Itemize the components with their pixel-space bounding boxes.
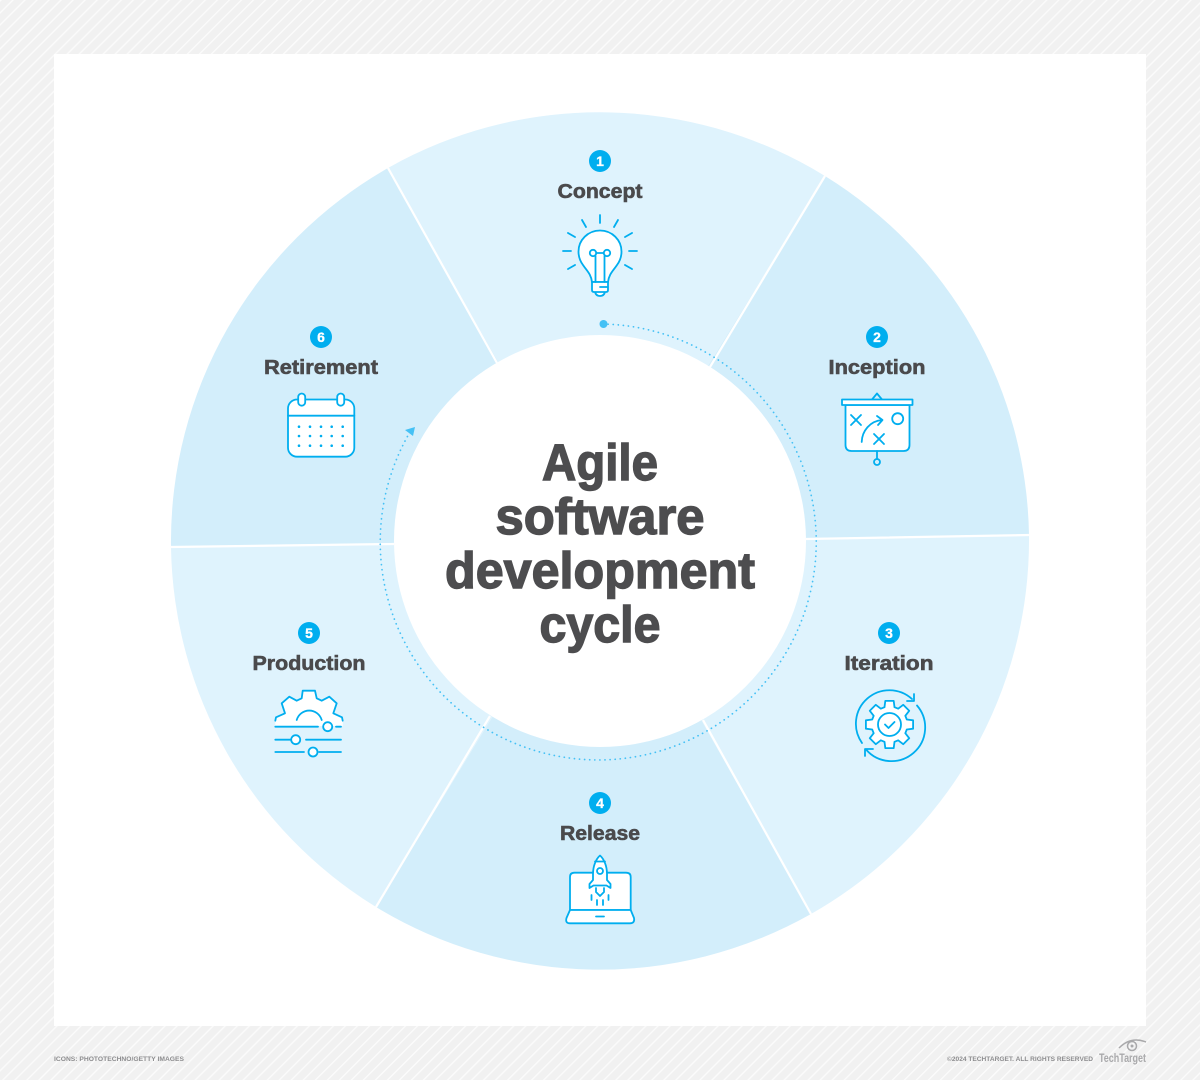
step 2: inception: Inception (828, 356, 926, 379)
footer: icon credit: ICONS: PHOTOTECHNO/GETTY IMAGES (54, 1056, 185, 1063)
segment 2 background (600, 176, 1029, 541)
logo: TechTarget (1099, 1040, 1146, 1065)
segment 4 background (376, 541, 811, 970)
icon: gear and sliders (275, 691, 343, 756)
title: Agile (542, 434, 658, 491)
step 2: inception: 2 (873, 329, 881, 345)
step 6: retirement: Retirement (264, 356, 378, 379)
step 4: release: 4 (596, 795, 604, 811)
icon: strategy board (842, 394, 912, 465)
segment 5 background (171, 541, 600, 907)
icon: light bulb (563, 215, 637, 296)
center white circle (394, 335, 806, 747)
step 6: retirement (264, 326, 378, 457)
footer: copyright: ©2024 TECHTARGET. ALL RIGHTS RESERVED (947, 1055, 1093, 1063)
step 5: production (252, 622, 366, 756)
segment 6 background (171, 168, 600, 547)
title (445, 434, 755, 653)
step 5: production: Production (252, 652, 366, 675)
step 4: release (560, 792, 640, 923)
title: software (496, 488, 704, 545)
step 6: retirement: 6 (317, 329, 325, 345)
step 1: concept: Concept (558, 180, 643, 203)
title: development (445, 542, 755, 599)
step 3: iteration (844, 622, 934, 761)
dotted cycle arrow (380, 320, 816, 760)
step 3: iteration: 3 (885, 625, 893, 641)
icon: gear cycle (856, 690, 925, 761)
icon: rocket and laptop (566, 856, 634, 923)
step 5: production: 5 (305, 625, 313, 641)
step 1: concept (558, 150, 643, 296)
title: cycle (540, 596, 660, 653)
step 3: iteration: Iteration (844, 652, 934, 675)
step 4: release: Release (560, 822, 640, 845)
ring chart: six cycle segments (171, 112, 1029, 970)
step 1: concept: 1 (596, 153, 604, 169)
step 2: inception (828, 326, 926, 465)
icon: calendar (288, 394, 354, 457)
logo: TechTarget: TechTarget (1099, 1053, 1146, 1065)
segment 1 background (388, 112, 825, 541)
segment 3 background (600, 535, 1029, 914)
